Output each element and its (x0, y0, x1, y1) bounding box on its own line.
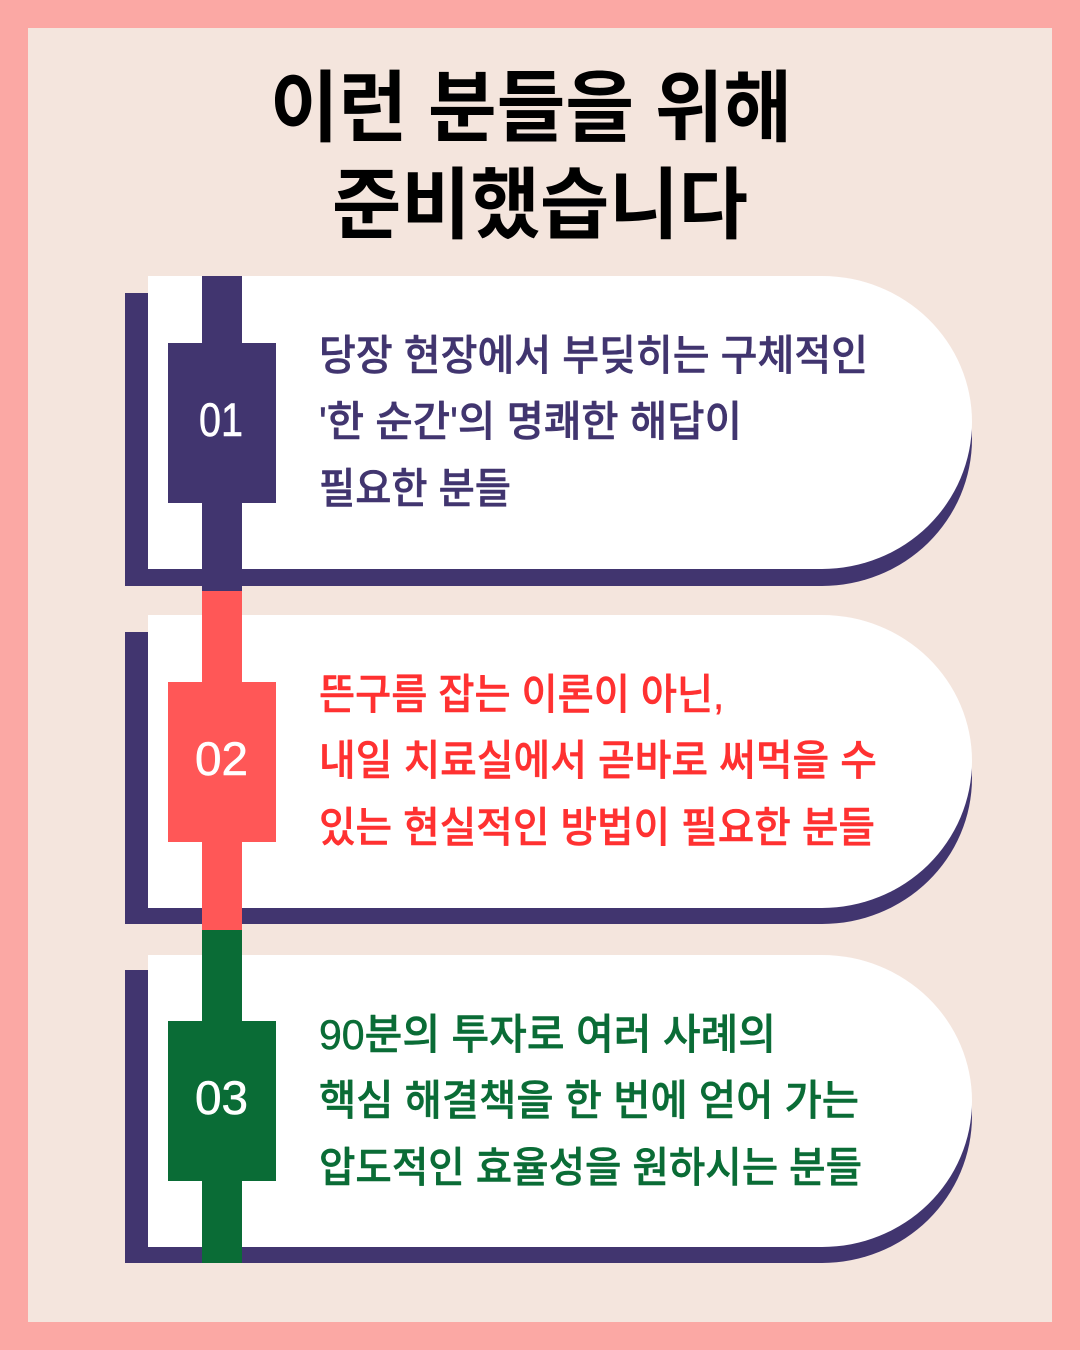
text 02 (319, 671, 877, 851)
text 03: 핵심 해결책을 한 번에 얻어 가는 (319, 1077, 859, 1124)
panel: item 01 (125, 276, 972, 591)
badge 02: 02 (195, 732, 248, 785)
text 03 (319, 1011, 862, 1191)
text 02: 뜬구름 잡는 이론이 아닌, (319, 671, 724, 718)
panel: item 03 (125, 930, 972, 1263)
text 01: 필요한 분들 (319, 465, 511, 512)
badge 03: 03 (195, 1071, 248, 1124)
text 01 (319, 332, 868, 512)
badge 02 (168, 682, 276, 842)
card 02 shadow (125, 632, 972, 924)
title (270, 64, 792, 249)
badge 01 (168, 343, 276, 503)
badge 01: 01 (199, 393, 243, 446)
panel: item 02 (125, 591, 972, 930)
title: 준비했습니다 (332, 161, 748, 249)
card 03 shadow (125, 970, 972, 1263)
text 01: '한 순간'의 명쾌한 해답이 (319, 398, 742, 445)
badge 03 (168, 1021, 276, 1181)
text 01: 당장 현장에서 부딪히는 구체적인 (319, 332, 868, 379)
card 02 connector (202, 591, 242, 930)
card 03 body (148, 955, 972, 1247)
text 02: 내일 치료실에서 곧바로 써먹을 수 (319, 737, 877, 784)
title: 이런 분들을 위해 (270, 64, 792, 152)
card 01 connector (202, 276, 242, 591)
card 02 body (148, 615, 972, 908)
text 03: 압도적인 효율성을 원하시는 분들 (319, 1144, 862, 1191)
card 01 shadow (125, 293, 972, 586)
card 03 connector (202, 930, 242, 1263)
text 02: 있는 현실적인 방법이 필요한 분들 (319, 804, 875, 851)
card 01 body (148, 276, 972, 569)
text 03: 90분의 투자로 여러 사례의 (319, 1011, 776, 1058)
